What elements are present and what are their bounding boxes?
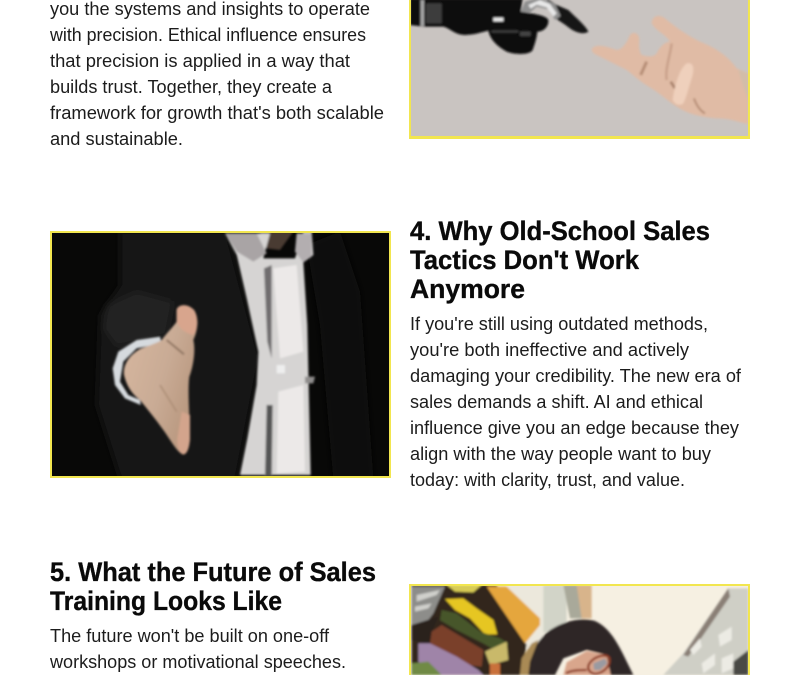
section 4 text block: today: with clarity, trust, and value. <box>410 470 685 490</box>
section 5 text block: workshops or motivational speeches. <box>49 652 346 672</box>
shirt cuff <box>113 337 162 405</box>
brick planter <box>430 625 483 667</box>
jacket <box>97 232 260 478</box>
face <box>563 651 611 675</box>
section 5 text block: The future won't be built on one-off <box>50 626 330 646</box>
purple flowers <box>418 643 483 675</box>
heading: section 4: Tactics Don't Work <box>410 245 639 275</box>
background storefront <box>507 585 543 648</box>
yellow flowers <box>445 598 497 634</box>
robot hand <box>410 0 548 54</box>
section 4 text block: sales demands a shift. AI and ethical <box>410 392 703 412</box>
image: robot hand reaching toward human hand <box>409 0 750 139</box>
section 3 text block: with precision. Ethical influence ensures <box>49 25 366 45</box>
orange awning <box>487 587 540 643</box>
striped cloth <box>412 587 445 627</box>
neck <box>260 232 293 250</box>
hair <box>525 619 633 675</box>
glasses <box>566 656 609 674</box>
heading: section 5: Training Looks Like <box>50 586 282 616</box>
section 4 text block: If you're still using outdated methods, <box>410 314 708 334</box>
hand <box>124 305 197 454</box>
section 5 text block <box>49 626 346 672</box>
heading: section 4: 4. Why Old-School Sales <box>410 216 710 246</box>
shirt <box>225 232 313 475</box>
section 3 text block: builds trust. Together, they create a <box>50 77 333 97</box>
section 4 text block: you're both ineffective and actively <box>410 340 689 360</box>
heading: section 5 <box>50 557 376 616</box>
section 3 text block: framework for growth that's both scalable <box>50 103 384 123</box>
heading: section 4: Anymore <box>410 274 525 304</box>
image: woman with glasses at a flower market <box>409 584 750 675</box>
heading: section 4 <box>410 216 710 304</box>
section 4 text block: influence give you an edge because they <box>410 418 739 438</box>
section 4 text block: damaging your credibility. The new era of <box>410 366 742 386</box>
section 4 text block: align with the way people want to buy <box>410 444 711 464</box>
section 4 text block <box>410 314 742 490</box>
section 3 text block <box>49 0 384 149</box>
image: businessman offering handshake <box>50 231 391 478</box>
right building <box>663 588 748 675</box>
section 3 text block: that precision is applied in a way that <box>50 51 350 71</box>
heading: section 5: 5. What the Future of Sales <box>50 557 376 587</box>
dark stall <box>412 585 527 675</box>
human hand <box>592 16 748 124</box>
section 3 text block: and sustainable. <box>50 129 183 149</box>
